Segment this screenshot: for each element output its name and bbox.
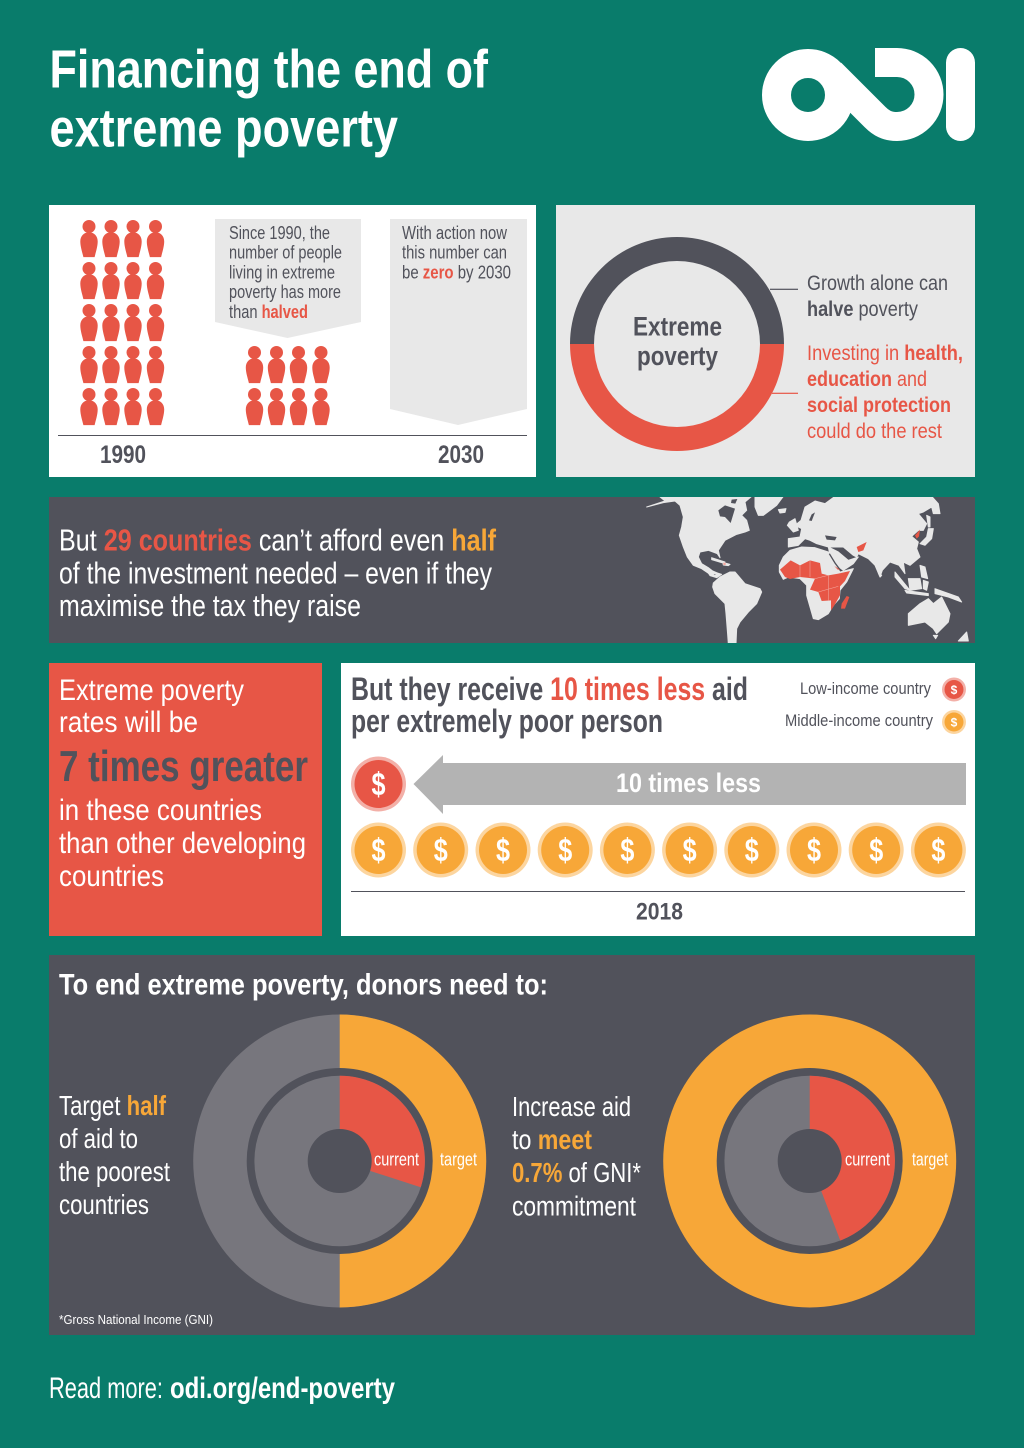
text: comparison: countries: [59, 860, 164, 893]
text: comparison: [59, 794, 306, 893]
banner text: [59, 522, 497, 623]
callout: zero by 2030: [390, 219, 527, 425]
label: 1990: 1990: [100, 441, 146, 469]
logo: ODI: [776, 48, 975, 141]
panel: aid comparison: [341, 663, 975, 936]
panel: 7 times greater: [49, 663, 322, 936]
callout: zero by 2030: this number can: [402, 242, 507, 262]
panel: extreme poverty ring: [556, 205, 975, 477]
title: Financing the end of: [50, 40, 489, 100]
banner text: maximise the tax they raise: [59, 588, 361, 623]
label: 2030: 2030: [438, 441, 484, 469]
text: comparison: than other developing: [59, 827, 306, 860]
donut chart: growth and investment: [570, 237, 798, 451]
text: poverty rates: rates will be: [59, 706, 198, 739]
text: meet commitment: Increase aid: [512, 1091, 631, 1122]
panel: people in extreme poverty over time: [49, 205, 536, 477]
text: investing: [807, 342, 963, 443]
callout: halved: living in extreme: [229, 262, 335, 282]
donut label: poverty: [637, 341, 718, 371]
text: investing: Investing in health,: [807, 342, 963, 365]
panel: 29 countries banner: [49, 496, 975, 644]
panel: donors need to: [49, 955, 975, 1335]
banner text: of the investment needed – even if they: [59, 556, 492, 590]
arrow: 10 times less: [414, 755, 966, 814]
coins: middle-income: [351, 822, 966, 878]
text: target half: [59, 1090, 170, 1220]
legend: $: [951, 716, 958, 730]
arrow: 10 times less: 10 times less: [616, 768, 761, 798]
read more link: odi.org/end-poverty: [170, 1372, 395, 1405]
coins: middle-income: $: [931, 832, 946, 868]
coins: middle-income: $: [683, 832, 697, 868]
text: growth: Growth alone can: [807, 272, 948, 295]
donut chart: GNI commitment: [663, 1014, 956, 1308]
callout: halved: Since 1990, the: [229, 223, 330, 243]
icons: 1990 people: [80, 220, 164, 425]
highlight: 7 times greater: 7 times greater: [59, 742, 308, 791]
donut chart: GNI commitment: current: [845, 1150, 890, 1170]
text: investing: could do the rest: [807, 420, 942, 443]
text: investing: education and: [807, 368, 927, 391]
donut label: [633, 312, 722, 371]
title: [50, 40, 489, 158]
text: target half: countries: [59, 1189, 149, 1220]
legend: [785, 678, 966, 734]
coins: middle-income: $: [372, 832, 386, 868]
donut label: Extreme: [633, 312, 722, 342]
callout: halved: [215, 219, 361, 338]
donut chart: aid to poorest countries: current: [374, 1150, 419, 1170]
coins: middle-income: $: [496, 832, 510, 868]
heading: 10 times less aid: [351, 671, 748, 739]
text: meet commitment: [512, 1091, 641, 1222]
callout: zero by 2030: With action now: [402, 223, 508, 243]
donut chart: aid to poorest countries: [193, 1014, 486, 1308]
coins: middle-income: $: [745, 832, 759, 868]
coins: middle-income: $: [558, 832, 572, 868]
text: meet commitment: 0.7% of GNI*: [512, 1157, 641, 1188]
footnote: *Gross National Income (GNI): [59, 1312, 213, 1327]
banner text: But 29 countries can’t afford even half: [59, 522, 497, 558]
legend: Low-income country: [800, 679, 931, 698]
text: target half: of aid to: [59, 1123, 138, 1154]
text: meet commitment: to meet: [512, 1124, 592, 1155]
world map: [647, 496, 968, 644]
donut chart: aid to poorest countries: target: [440, 1150, 477, 1170]
heading: 10 times less aid: per extremely poor person: [351, 703, 663, 739]
text: meet commitment: commitment: [512, 1190, 636, 1222]
text: growth: [807, 272, 948, 321]
heading: donors: To end extreme poverty, donors need to:: [59, 968, 548, 1002]
callout: halved: poverty has more: [229, 282, 341, 302]
legend: $: [951, 683, 958, 697]
text: comparison: in these countries: [59, 794, 262, 827]
callout: halved: than halved: [229, 302, 308, 322]
callout: halved: number of people: [229, 242, 342, 262]
heading: 10 times less aid: But they receive 10 times less aid: [351, 671, 748, 707]
label: 2018: 2018: [636, 898, 683, 926]
coins: middle-income: $: [807, 832, 821, 868]
title: extreme poverty: [50, 98, 398, 158]
coins: middle-income: $: [434, 832, 448, 868]
legend: Middle-income country: [785, 711, 933, 730]
text: growth: halve poverty: [807, 298, 918, 321]
text: target half: the poorest: [59, 1156, 170, 1187]
icons: today people: [246, 346, 330, 425]
callout: zero by 2030: be zero by 2030: [402, 262, 511, 282]
coin: low-income: [351, 756, 406, 812]
coins: middle-income: $: [620, 832, 635, 868]
coins: middle-income: $: [869, 832, 883, 868]
coin: low-income: $: [372, 766, 386, 802]
text: poverty rates: [59, 674, 244, 739]
donut chart: GNI commitment: target: [912, 1150, 948, 1170]
text: investing: social protection: [807, 394, 951, 417]
text: poverty rates: Extreme poverty: [59, 674, 244, 707]
read more link: [49, 1372, 395, 1405]
read more link: Read more:: [49, 1372, 163, 1405]
text: target half: Target half: [59, 1090, 167, 1121]
